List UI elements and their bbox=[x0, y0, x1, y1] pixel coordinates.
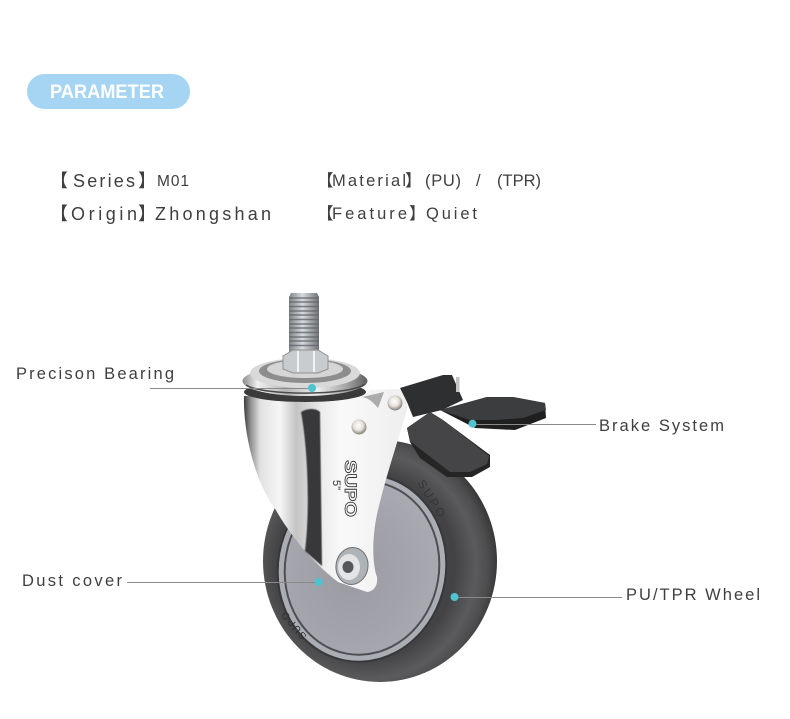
parameter: material bbox=[317, 171, 541, 190]
parameter: origin: 】 bbox=[138, 204, 156, 224]
label: Dust cover: Dust cover bbox=[22, 572, 122, 590]
wheel bbox=[262, 440, 497, 682]
parameter: material: / bbox=[476, 172, 481, 190]
fork rivets bbox=[352, 396, 402, 434]
heading pill: PARAMETER bbox=[27, 74, 190, 109]
parameter: material: (TPR) bbox=[497, 172, 541, 190]
parameter: series: 【 bbox=[50, 171, 68, 191]
parameter: feature: Quiet bbox=[426, 205, 477, 223]
parameter: origin: Origin bbox=[71, 204, 137, 224]
parameter: feature: Feature bbox=[332, 205, 407, 223]
teal dot: wheel bbox=[450, 593, 458, 601]
parameter: material: 【 bbox=[317, 171, 334, 190]
parameter: origin bbox=[50, 204, 271, 224]
parameter: series bbox=[50, 171, 189, 191]
size mark: 5" bbox=[330, 480, 342, 490]
axle bolt bbox=[333, 545, 371, 587]
parameter: feature: 【 bbox=[317, 204, 334, 223]
brake lever top face bbox=[407, 412, 489, 472]
fork housing bbox=[244, 389, 407, 592]
brake pin bbox=[456, 377, 460, 392]
brake pedal bbox=[440, 397, 546, 430]
brake bar bbox=[400, 375, 463, 417]
label: PU/TPR Wheel: PU/TPR Wheel bbox=[626, 586, 760, 604]
teal dot: brake bbox=[468, 420, 476, 428]
swivel flange bearing bbox=[242, 350, 368, 402]
fork tip shading bbox=[362, 392, 384, 408]
parameter: series: Series bbox=[73, 171, 135, 191]
parameter: material: Material bbox=[332, 172, 406, 190]
brake pedal top face bbox=[440, 397, 546, 420]
wheel: SUPO bbox=[279, 608, 309, 641]
teal dot: bearing bbox=[308, 384, 316, 392]
fork logo: SUPO bbox=[341, 460, 360, 517]
caster wheel illustration bbox=[242, 293, 546, 682]
parameter: material: (PU) bbox=[425, 172, 461, 190]
wheel: SUPO bbox=[414, 477, 450, 522]
parameter: feature bbox=[317, 204, 477, 223]
parameter: series: 】 bbox=[138, 171, 156, 191]
label: Brake System: Brake System bbox=[599, 417, 724, 435]
teal dot: dust cover bbox=[314, 578, 322, 586]
fork shadow stripe bbox=[301, 409, 322, 566]
brake lever bbox=[407, 412, 490, 477]
parameter: material: 】 bbox=[405, 171, 422, 190]
label: Precison Bearing: Precison Bearing bbox=[16, 365, 174, 383]
parameter: feature: 】 bbox=[409, 204, 426, 223]
parameter: origin: Zhongshan bbox=[155, 204, 271, 224]
parameter: origin: 【 bbox=[50, 204, 68, 224]
threaded stem bbox=[289, 293, 319, 352]
heading pill: PARAMETER: PARAMETER bbox=[50, 82, 164, 103]
parameter: series: M01 bbox=[157, 173, 189, 190]
